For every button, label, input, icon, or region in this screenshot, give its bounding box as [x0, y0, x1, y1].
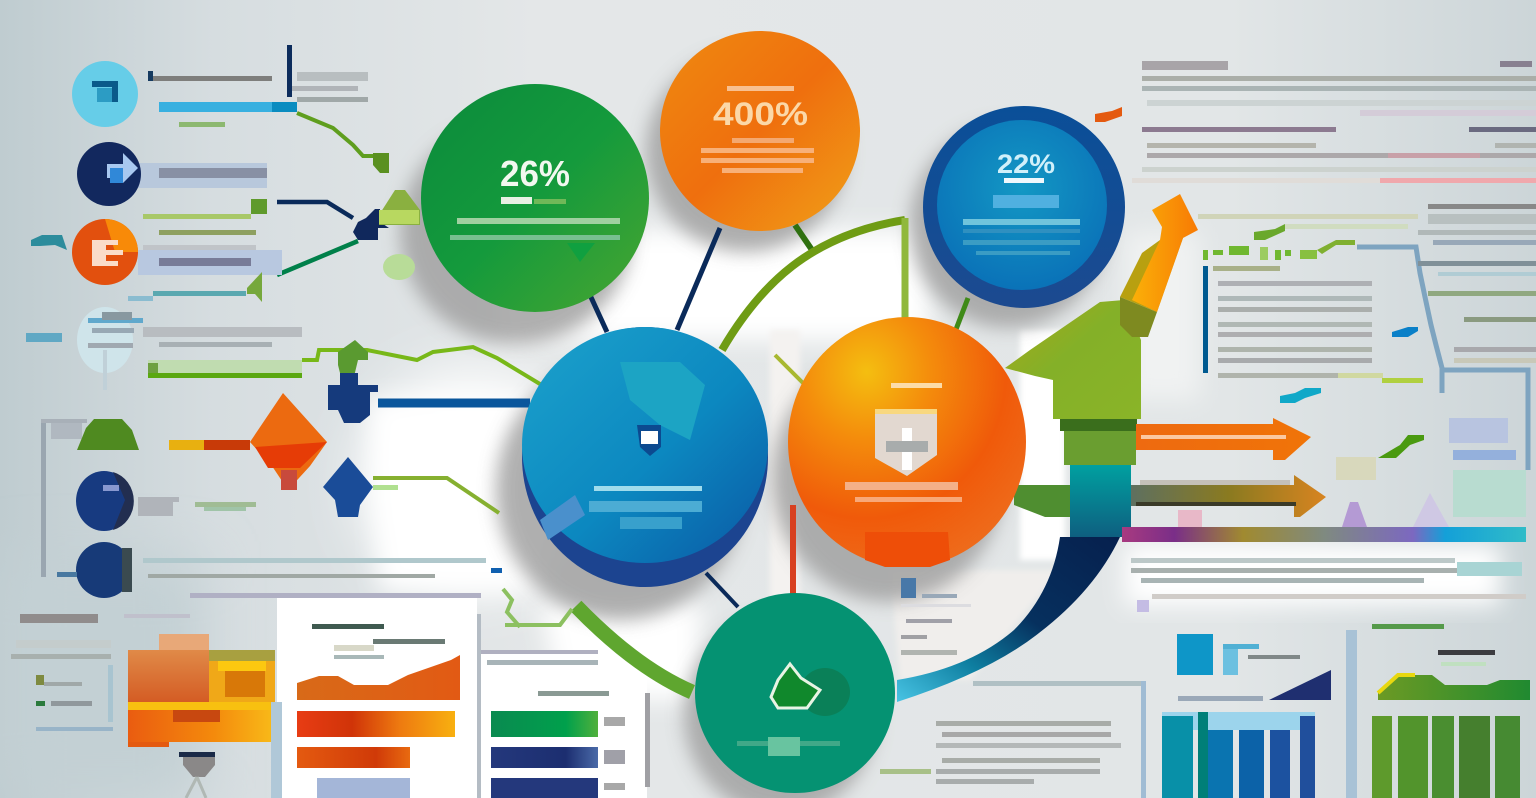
circle drop shadows [400, 52, 1106, 798]
white bottom panel [190, 593, 647, 798]
teal circle bottom [695, 593, 895, 793]
thick green connector and squiggle [503, 589, 692, 692]
green line label near diamond [373, 485, 398, 490]
lower right small chart icons [1336, 418, 1526, 517]
bottom text panel [880, 681, 1146, 798]
orange area and bar chart [297, 624, 460, 798]
top right text block [1095, 61, 1536, 183]
vertical divider [1346, 630, 1357, 798]
orange circle top [660, 31, 860, 231]
text lines below rainbow bar [1131, 558, 1526, 612]
green label lines [143, 199, 267, 235]
green and navy bar chart [481, 650, 650, 798]
left list item: orange circle [31, 219, 282, 285]
left link lines [277, 113, 540, 513]
curved arc: navy to cyan [897, 537, 1120, 702]
rainbow bar [1122, 527, 1526, 542]
green stacked arrow column [1005, 194, 1198, 537]
orange right arrow [1136, 418, 1311, 460]
blue lower line and green arrow [128, 272, 262, 302]
left list item: cyan circle [72, 45, 368, 127]
olive right arrow [1131, 475, 1326, 517]
left list item: navy circle [77, 142, 267, 206]
left lines above bottom panel [143, 558, 502, 578]
orange gradient circle middle [788, 317, 1026, 567]
network node [353, 209, 389, 240]
icon: tree [771, 664, 820, 708]
blue circle right: 22% [997, 149, 1055, 179]
right text lines [1418, 204, 1536, 363]
connector lines between circles [590, 218, 968, 607]
dark circle two [57, 542, 132, 598]
green circle: 26% [500, 153, 570, 194]
big blue circle [522, 327, 768, 587]
left green arrowhead [373, 153, 389, 173]
green blob near green circle [379, 190, 420, 280]
stepped bracket line [1357, 247, 1528, 470]
small note under orange circle [901, 578, 971, 655]
dark circle one [76, 471, 256, 531]
bottom right bar chart: blue [1162, 634, 1331, 798]
bottom-left text legend [11, 614, 190, 731]
orange circle top: 400% [713, 96, 808, 132]
blue circle right [923, 106, 1125, 308]
left vertical frame [41, 419, 87, 577]
green dome [77, 419, 139, 450]
green circle [421, 84, 649, 312]
orange diamond with tail [169, 393, 327, 490]
middle right bracket text [1198, 214, 1423, 403]
bottom right bar chart: green [1372, 624, 1530, 798]
left list item: pale circle with text [26, 307, 302, 390]
white central glow [360, 230, 1500, 700]
green bar with leaf arrow [148, 340, 368, 385]
blue node left [328, 373, 378, 423]
small lilac peaks [1178, 493, 1449, 527]
orange block chart [128, 634, 275, 747]
blue diamond [323, 457, 373, 517]
funnel icon [179, 752, 215, 798]
